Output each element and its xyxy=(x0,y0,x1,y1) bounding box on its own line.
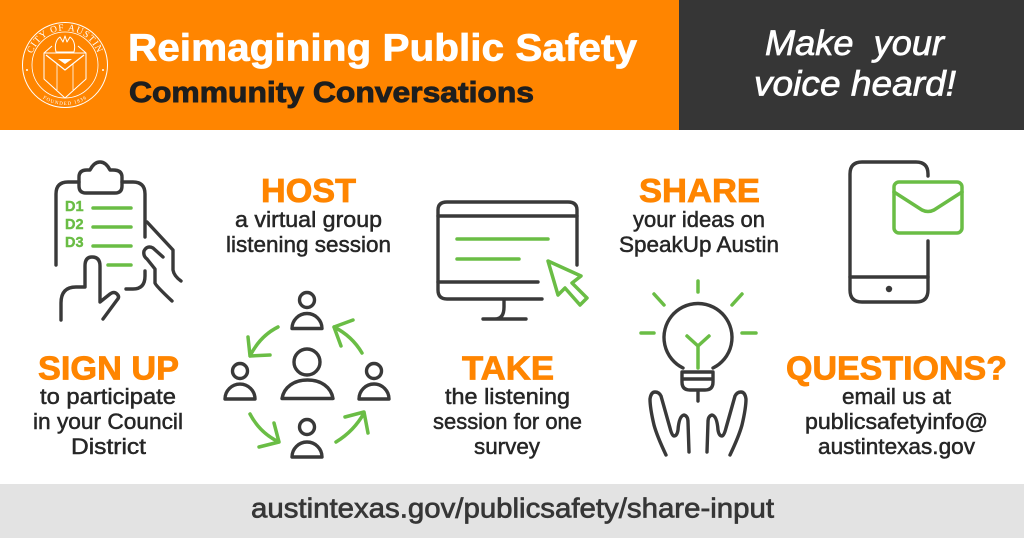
icon: phone with envelope xyxy=(850,162,962,302)
text: questions details: email us at xyxy=(842,384,951,409)
title: Reimagining Public Safety xyxy=(128,28,637,70)
slogan text: voice heard! xyxy=(754,64,956,104)
text: sign up details: to participate xyxy=(40,384,176,409)
icon: computer monitor with cursor xyxy=(438,202,587,319)
footer band with URL xyxy=(0,484,1024,538)
text: sign up details xyxy=(33,384,183,459)
text: questions details: publicsafetyinfo@ xyxy=(805,409,988,434)
text: sign up details: District xyxy=(71,434,146,459)
text: take details: session for one xyxy=(433,409,582,434)
text: sign up details: in your Council xyxy=(33,409,183,434)
text: take details: the listening xyxy=(445,384,570,409)
header banner: orange xyxy=(0,0,679,130)
slogan text xyxy=(754,24,956,104)
heading: take: TAKE xyxy=(462,350,554,386)
footer URL: austintexas.gov/publicsafety/share-input xyxy=(251,492,774,524)
slogan text: Make your xyxy=(765,24,945,63)
header panel: slogan xyxy=(679,0,1024,130)
icon: clipboard with hand: D1 xyxy=(65,199,84,215)
text: questions details: austintexas.gov xyxy=(818,434,975,459)
heading: host: HOST xyxy=(261,172,356,209)
icon: City of Austin seal: CITY OF AUSTIN xyxy=(28,24,103,52)
subtitle: Community Conversations xyxy=(129,77,534,109)
icon: clipboard with hand xyxy=(56,162,181,320)
icon: City of Austin seal: FOUNDED 1839 xyxy=(42,96,86,105)
text: host details: a virtual group xyxy=(235,207,382,232)
heading: sign up: SIGN UP xyxy=(38,350,179,386)
text: share details: SpeakUp Austin xyxy=(619,232,779,257)
icon: clipboard with hand: D3 xyxy=(65,235,84,251)
text: host details: listening session xyxy=(226,232,391,257)
text: share details: your ideas on xyxy=(633,207,765,232)
heading: share: SHARE xyxy=(639,172,760,209)
icon: lightbulb with hands xyxy=(641,281,756,455)
icon: City of Austin seal xyxy=(22,22,108,108)
text: questions details xyxy=(805,384,988,459)
heading: questions: QUESTIONS? xyxy=(786,350,1007,386)
icon: group circle with arrows xyxy=(225,292,389,457)
icon: clipboard with hand: D2 xyxy=(65,217,84,233)
text: host details xyxy=(226,207,391,257)
text: share details xyxy=(619,207,779,257)
text: take details xyxy=(433,384,582,459)
text: take details: survey xyxy=(474,434,540,459)
